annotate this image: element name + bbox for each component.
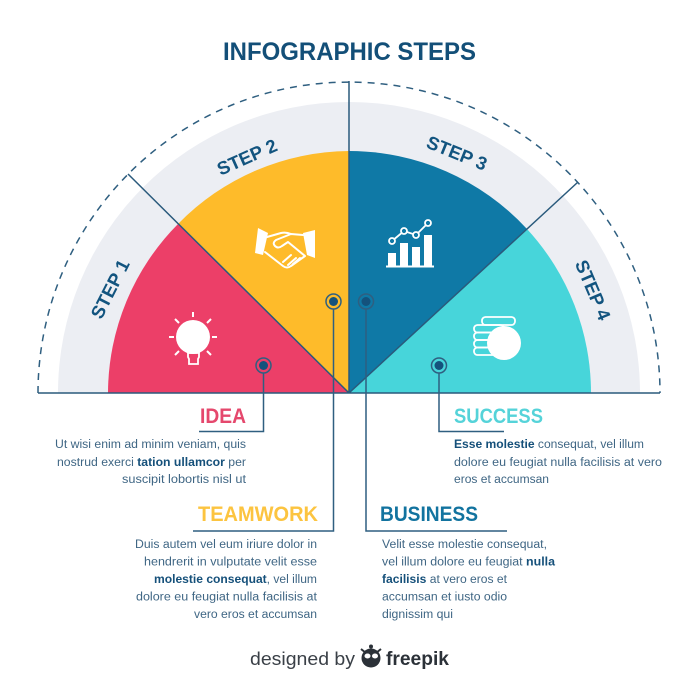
text: business: Velit esse molestie consequat,	[382, 539, 547, 551]
text: teamwork: vero eros et accumsan	[194, 609, 317, 621]
text: idea: suscipit lobortis nisl ut	[122, 474, 247, 486]
icon: bar chart	[386, 220, 434, 268]
connector: business	[358, 294, 507, 531]
sector: step 2 yellow	[178, 151, 349, 393]
connector: success	[432, 358, 504, 432]
footer: designed by freepik	[250, 644, 449, 670]
sector: step 4 teal	[349, 229, 591, 393]
connector: idea	[199, 358, 271, 432]
footer: designed by freepik: designed by	[250, 649, 355, 669]
text: success: Esse molestie consequat, vel illum	[454, 439, 644, 451]
text: teamwork: Duis autem vel eum iriure dolor in	[135, 539, 317, 551]
text: success	[454, 439, 662, 486]
text: idea: Ut wisi enim ad minim veniam, quis	[55, 439, 246, 451]
title: INFOGRAPHIC STEPS	[223, 38, 476, 66]
label: step 4: STEP 4	[571, 257, 615, 324]
heading: idea: IDEA	[200, 405, 246, 428]
text: teamwork	[135, 539, 318, 621]
sector: step 3 blue	[349, 151, 527, 393]
text: business	[382, 539, 556, 621]
heading: teamwork: TEAMWORK	[198, 503, 318, 526]
heading: success: SUCCESS	[454, 405, 543, 428]
text: success: eros et accumsan	[454, 474, 549, 486]
icon: handshake	[255, 228, 315, 268]
heading: business: BUSINESS	[380, 503, 478, 526]
text: idea	[55, 439, 247, 486]
connector: teamwork	[193, 294, 341, 531]
icon: freepik mascot	[361, 644, 381, 668]
sector: step 1 pink	[108, 224, 349, 393]
text: business: facilisis at vero eros et	[382, 574, 508, 586]
label: step 1: STEP 1	[86, 256, 134, 322]
label: step 2: STEP 2	[214, 135, 280, 179]
text: success: dolore eu feugiat nulla facilisis at vero	[454, 457, 662, 469]
icon: coins	[474, 317, 521, 360]
semicircle chart	[38, 81, 660, 393]
label: step 3: STEP 3	[424, 131, 490, 175]
text: teamwork: molestie consequat , vel illum	[154, 574, 317, 586]
text: business: dignissim qui	[382, 609, 453, 621]
outer grey band	[58, 102, 640, 393]
text: teamwork: hendrerit in vulputate velit esse	[144, 556, 317, 568]
footer: designed by freepik: freepik	[386, 649, 449, 670]
text: teamwork: dolore eu feugiat nulla facilisis at	[136, 592, 318, 604]
text: business: vel illum dolore eu feugiat nulla	[382, 556, 556, 568]
divider lines and baseline	[38, 81, 660, 393]
dashed outer arc	[38, 82, 660, 393]
icon: light bulb	[169, 312, 217, 364]
text: idea: nostrud exerci tation ullamcor per	[57, 457, 246, 469]
text: business: accumsan et iusto odio	[382, 592, 507, 604]
